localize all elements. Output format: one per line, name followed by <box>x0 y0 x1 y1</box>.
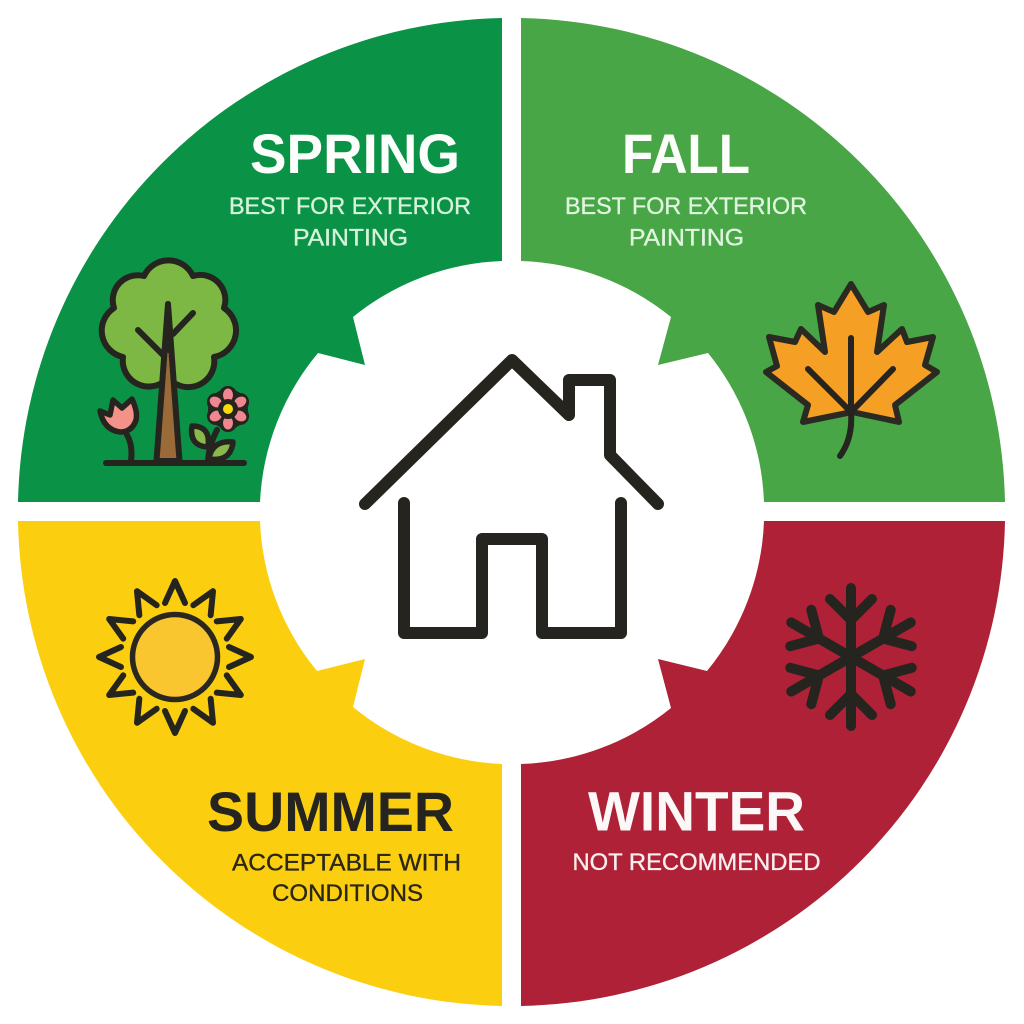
spring quadrant <box>18 18 502 502</box>
fall description: PAINTING <box>629 224 744 252</box>
winter description: NOT RECOMMENDED <box>572 849 820 876</box>
spring description <box>229 193 471 252</box>
winter heading: WINTER <box>588 780 805 842</box>
summer description: ACCEPTABLE WITH <box>232 850 461 876</box>
winter quadrant <box>521 521 1005 1006</box>
tree trunk <box>156 304 180 461</box>
tree branches <box>138 304 193 355</box>
fall description: BEST FOR EXTERIOR <box>565 193 807 220</box>
fall heading: FALL <box>622 122 750 185</box>
summer description <box>232 850 461 907</box>
spring description: BEST FOR EXTERIOR <box>229 193 471 220</box>
icon: tree and flowers <box>100 260 249 463</box>
tulip stem <box>127 435 132 461</box>
flower stem and leaves <box>192 426 233 461</box>
walls and door <box>404 503 621 633</box>
spring description: PAINTING <box>293 224 408 252</box>
icon: snowflake <box>781 588 921 726</box>
summer heading: SUMMER <box>207 780 454 843</box>
panel: winter <box>521 521 1005 1006</box>
panel: summer <box>18 521 502 1006</box>
ground line <box>106 460 244 466</box>
fall description <box>565 193 807 252</box>
panel: spring <box>18 18 502 502</box>
tree foliage <box>102 260 236 387</box>
fall quadrant <box>521 18 1005 502</box>
flower head <box>207 386 249 432</box>
tulip <box>100 399 136 432</box>
summer quadrant <box>18 521 502 1006</box>
spring heading: SPRING <box>250 122 460 185</box>
roof and chimney <box>365 360 658 504</box>
summer description: CONDITIONS <box>272 880 423 907</box>
icon: maple leaf <box>766 284 937 456</box>
panel: fall <box>521 18 1005 502</box>
icon: house <box>365 360 658 633</box>
icon: sun <box>99 581 251 733</box>
